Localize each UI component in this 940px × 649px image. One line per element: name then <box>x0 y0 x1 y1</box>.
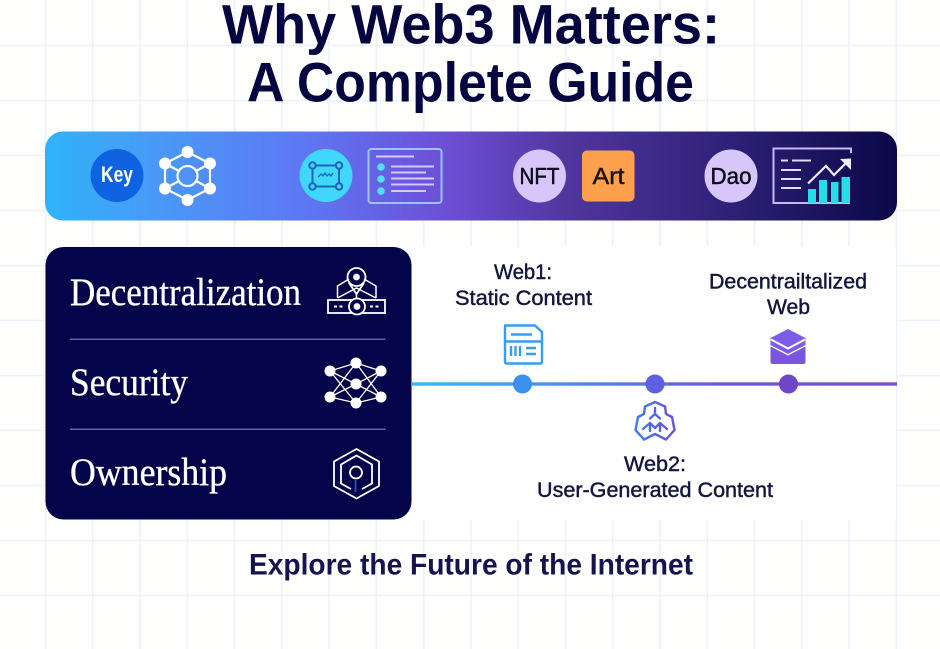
divider <box>70 339 386 340</box>
icon: hexagon lock <box>334 449 379 498</box>
icon: Dao badge <box>704 150 758 202</box>
icon: Art tile: Art <box>592 163 625 189</box>
footer tagline: Explore the Future of the Internet <box>249 548 693 582</box>
icon: hexagon network <box>159 146 216 206</box>
icon: static document <box>505 326 542 364</box>
label: Web2: User-Generated Content <box>537 479 773 502</box>
heading: Security: Security <box>70 361 188 404</box>
label: Web1: Web1: <box>494 261 552 284</box>
panel: core principles <box>46 247 412 520</box>
label: Decentralized Web <box>709 270 867 319</box>
icon: location network <box>328 268 385 314</box>
icon: security mesh <box>324 358 386 408</box>
icon: list card <box>368 149 442 203</box>
icon: key badge: Key <box>101 162 134 187</box>
icon: NFT badge <box>513 150 566 202</box>
icon: community trefoil <box>636 402 674 440</box>
label: Decentralized Web: Web <box>767 296 810 319</box>
divider <box>70 429 386 430</box>
icon: growth chart card <box>774 148 851 203</box>
icon: key badge <box>90 149 144 202</box>
title <box>222 0 720 114</box>
heading: Decentralization: Decentralization <box>70 271 301 314</box>
timeline node: Web2 <box>646 374 664 394</box>
label: Web1 <box>455 261 592 310</box>
icon: Dao badge: Dao <box>710 163 752 189</box>
chart: web evolution timeline <box>412 261 897 502</box>
icon: cyan contract badge <box>300 149 352 202</box>
timeline node: Web1 <box>513 374 532 394</box>
label: Decentralized Web: Decentrailtalized <box>709 270 867 294</box>
label: Web2: Web2: <box>624 453 686 476</box>
icon: NFT badge: NFT <box>520 163 560 189</box>
title: A Complete Guide <box>247 50 694 114</box>
timeline node: Decentralized Web <box>779 374 798 394</box>
icon: layered box <box>770 329 806 364</box>
heading: Ownership: Ownership <box>70 451 227 494</box>
label: Web1: Static Content <box>455 287 592 310</box>
timeline line <box>412 382 897 386</box>
label: Web2 <box>537 453 773 502</box>
panel: gradient icon band <box>45 132 897 220</box>
icon: Art tile <box>582 150 634 202</box>
